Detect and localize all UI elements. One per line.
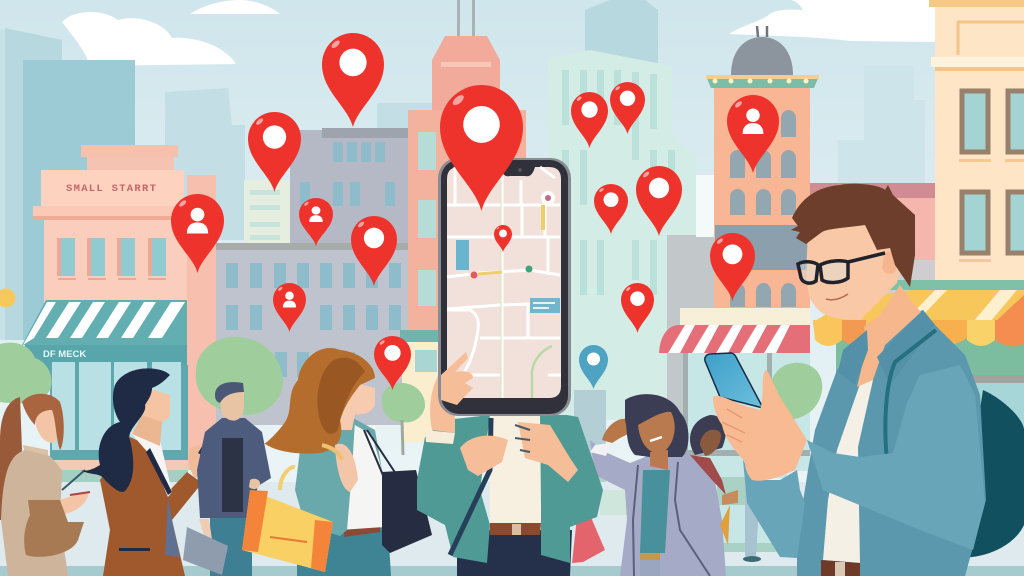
person: man with glasses and backpack <box>705 184 1024 576</box>
central smartphone with map <box>438 158 571 416</box>
clouds <box>62 0 935 66</box>
map pin 14 <box>710 233 755 301</box>
map pin 10 <box>610 82 645 134</box>
small yellow lamp <box>0 288 16 308</box>
hand <box>713 370 807 481</box>
person: woman behind, curly hair <box>690 415 761 562</box>
map pin 7 <box>374 336 411 390</box>
map pin 5 <box>351 216 397 286</box>
person: woman with auburn hair <box>242 348 432 576</box>
small phone <box>705 353 763 408</box>
jacket collar <box>838 310 935 385</box>
shop fascia text: DF MECK <box>43 349 86 360</box>
head <box>807 215 905 320</box>
pink shopping bag <box>572 515 605 563</box>
dark tote bag <box>382 470 432 553</box>
map pin 13 person <box>727 95 779 173</box>
trees <box>0 337 822 455</box>
person: central figure holding phone <box>417 352 603 576</box>
pink building <box>810 183 938 295</box>
ear <box>882 251 897 274</box>
map pin 11 <box>594 184 628 234</box>
large red map pin <box>440 85 523 211</box>
map pin 2 <box>248 112 301 192</box>
red striped awning shop <box>659 308 810 471</box>
person: woman in gray jacket <box>590 394 726 576</box>
map pin 3 person <box>171 194 224 273</box>
salmon tower <box>400 0 526 442</box>
green tower <box>548 50 714 490</box>
cream building right <box>929 0 1024 285</box>
gray apartment buildings <box>215 128 410 425</box>
backpack strap <box>885 330 936 470</box>
shop sign text: SMALL STARRT <box>66 183 157 195</box>
backpack <box>957 390 1024 557</box>
blue map pin <box>579 345 608 389</box>
fingers over phone <box>441 352 473 405</box>
map pin 9 <box>571 92 608 148</box>
smile <box>826 294 848 300</box>
map screen <box>447 167 561 398</box>
ground <box>0 456 1024 576</box>
sleeve upper arm and forearm <box>807 365 985 550</box>
background skyline <box>0 0 925 340</box>
map pin 1 <box>322 33 384 127</box>
map pin 6 person <box>273 283 306 332</box>
storefront: small shop left <box>22 145 216 482</box>
hair <box>791 184 915 287</box>
map pin 15 <box>621 283 654 333</box>
belt <box>821 560 860 576</box>
t-shirt <box>823 380 873 563</box>
person: woman with ponytail and beige coat <box>0 394 90 576</box>
neck and chest <box>857 285 921 387</box>
yellow shopping bag <box>242 490 333 572</box>
person: boy with hoodie <box>183 382 271 576</box>
map pin 4 person <box>299 198 333 246</box>
map pin 12 <box>636 166 682 236</box>
person: woman with dark hair and brown coat <box>80 368 223 576</box>
yellow awning shop <box>813 280 1024 483</box>
domed orange tower <box>706 26 819 311</box>
sleeve near hand <box>743 460 805 558</box>
jacket torso <box>797 310 986 576</box>
glasses <box>798 253 885 283</box>
